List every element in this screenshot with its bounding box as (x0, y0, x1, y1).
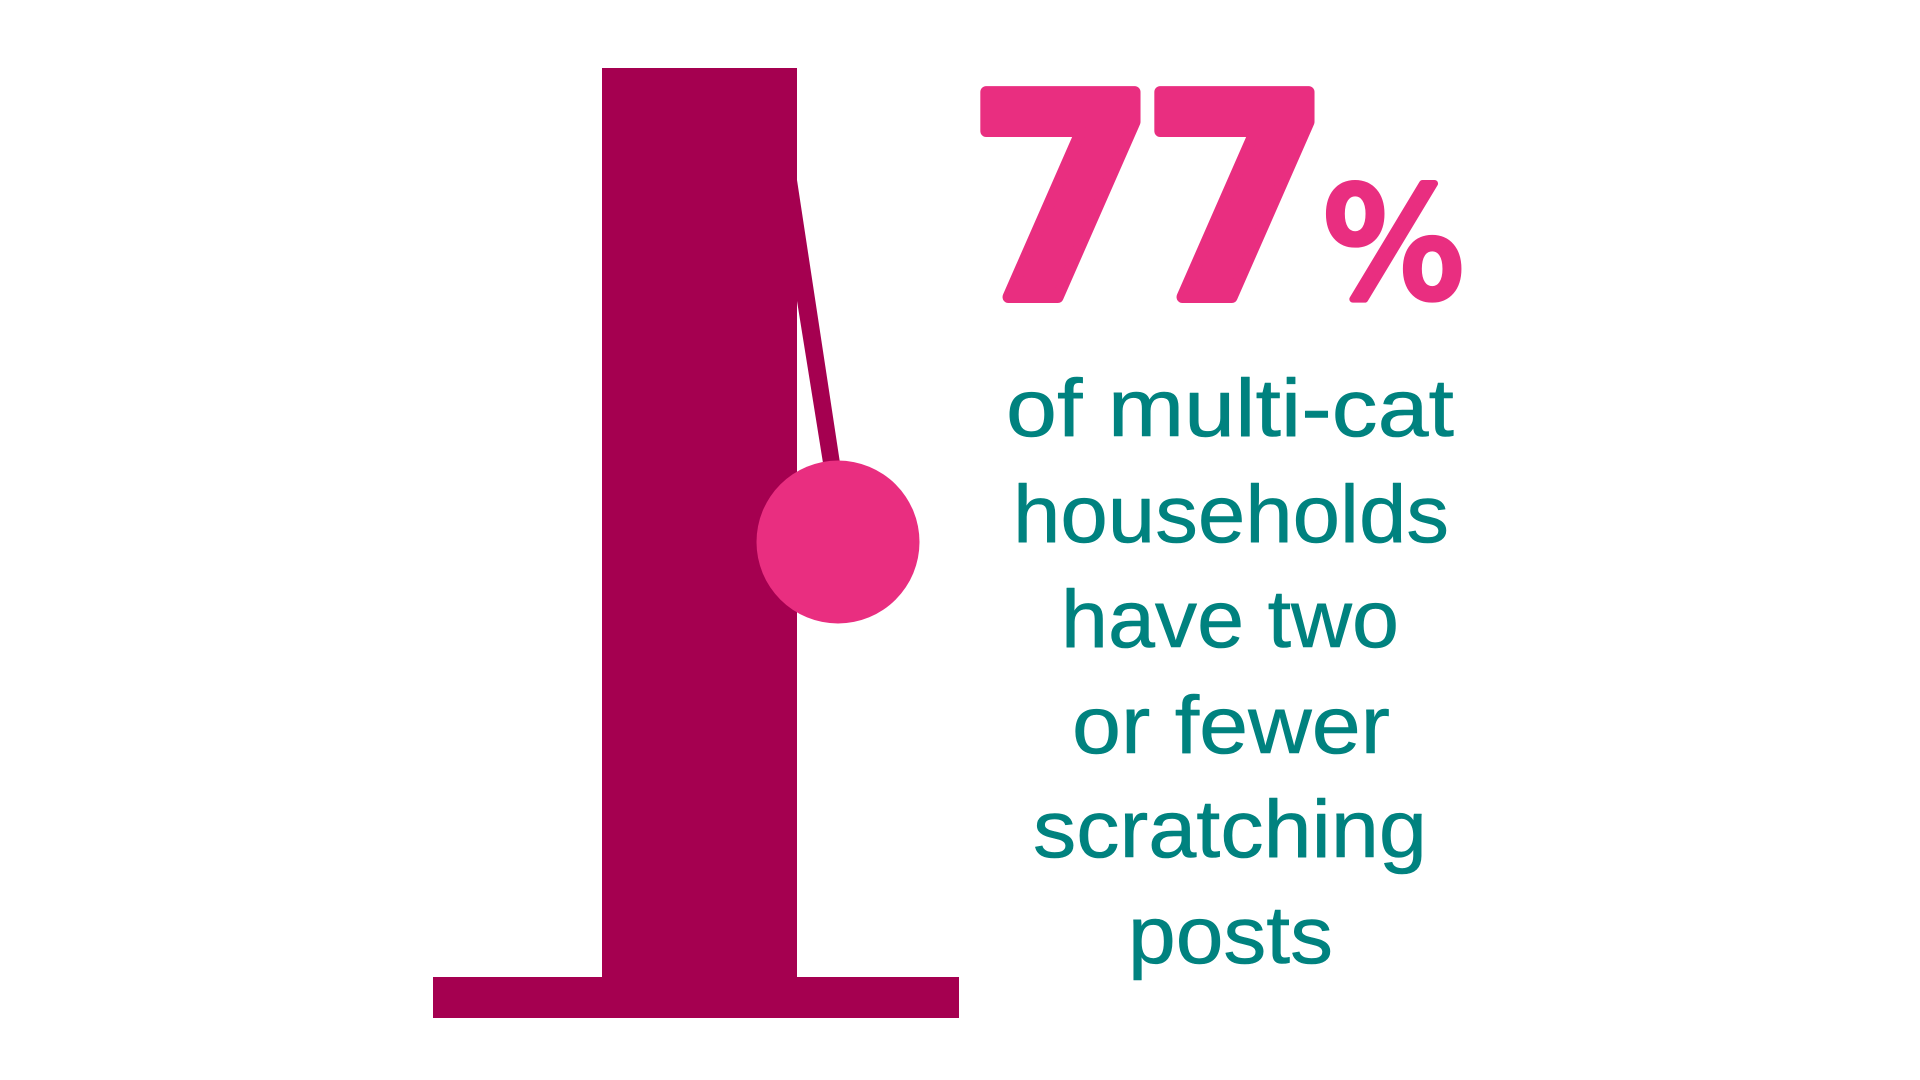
line: households: households (1013, 469, 1449, 560)
statistic: 77 percent (968, 37, 1466, 364)
icon: scratching post with hanging ball (433, 68, 959, 1018)
description text (1006, 363, 1454, 981)
toy ball (756, 460, 920, 624)
line: have two: have two (1061, 574, 1399, 665)
line: scratching: scratching (1033, 784, 1427, 875)
line: posts: posts (1128, 890, 1333, 981)
line: of multi-cat: of multi-cat (1006, 363, 1454, 454)
digit 7 first: 7 (968, 37, 1156, 364)
percent sign: % (1321, 156, 1466, 334)
digit 7 second: 7 (1142, 37, 1330, 364)
scratching post column and base (433, 68, 959, 1018)
line: or fewer: or fewer (1072, 680, 1390, 771)
toy string (797, 180, 840, 463)
